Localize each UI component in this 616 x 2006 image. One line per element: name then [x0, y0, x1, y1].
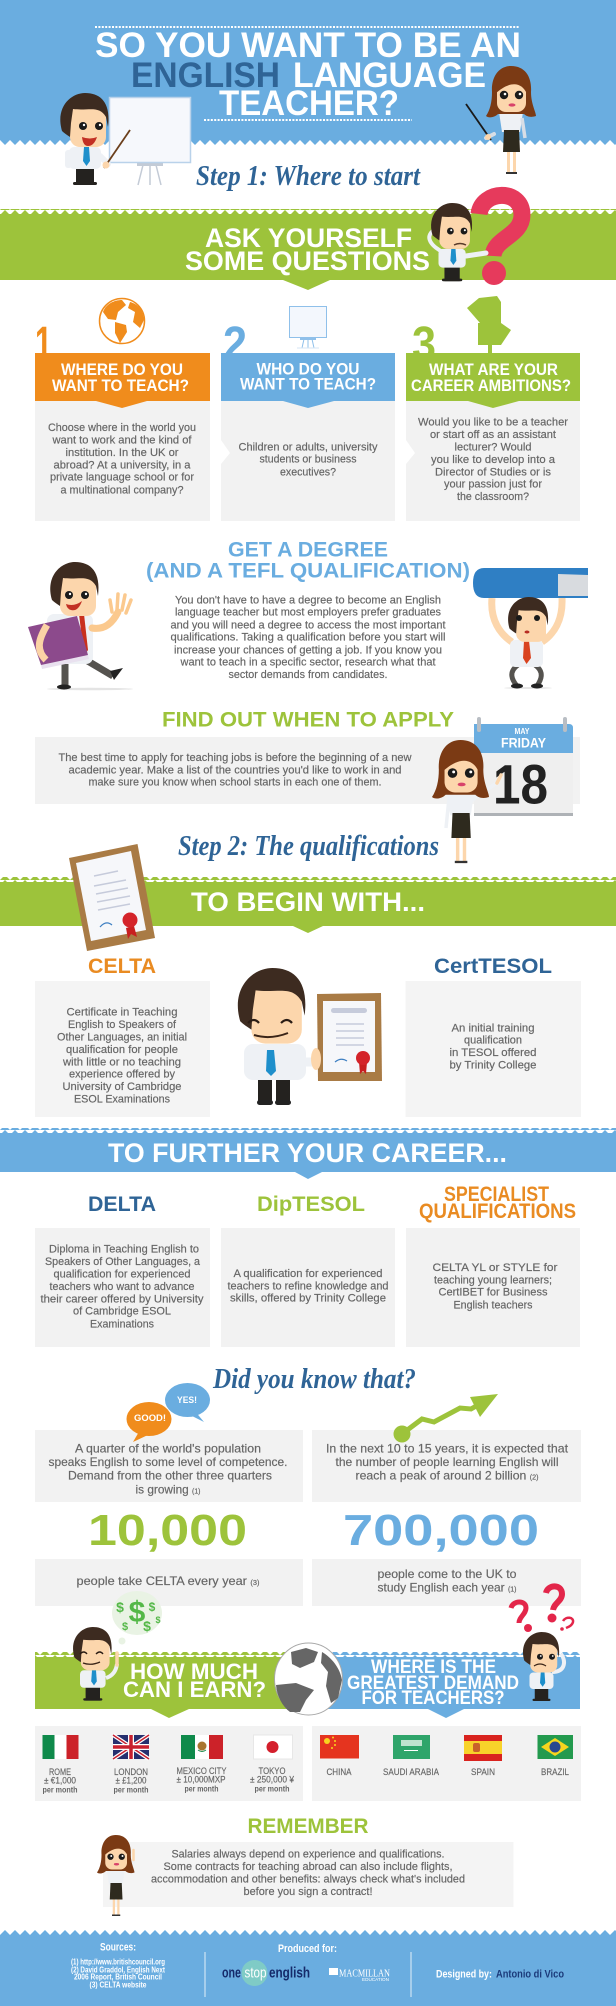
panel: who do you want to teach: Children or adults, university — [238, 441, 378, 453]
icon: calendar: MAY — [514, 727, 530, 736]
icon: calendar — [474, 717, 573, 816]
band: to further your career — [0, 1128, 616, 1179]
band: ask yourself: ASK YOURSELF — [205, 223, 412, 253]
panel: DELTA: qualification for experienced — [54, 1269, 190, 1281]
panel: DELTA: DELTA — [88, 1193, 156, 1216]
stat: 10,000 — [35, 1506, 303, 1606]
panel: salaries by city: per month — [254, 1783, 290, 1793]
section: get a degree: language teacher but most employers prefer graduates — [175, 607, 441, 619]
panel: CELTA: qualification for people — [66, 1044, 178, 1056]
title: SO YOU WANT TO BE AN — [95, 26, 521, 65]
band: to begin with: TO BEGIN WITH... — [191, 887, 425, 917]
panel: DELTA: Diploma in Teaching English to — [49, 1244, 199, 1256]
footer: sources — [71, 1942, 165, 1989]
panel: 2 billion learners: reach a peak of around 2 billion (2) — [356, 1469, 538, 1483]
panel: CELTA: CELTA — [88, 955, 156, 978]
section: get a degree: want to teach in a specific sector, research what that — [179, 657, 436, 669]
panel: specialist qualifications: SPECIALIST — [444, 1183, 549, 1206]
panel: career ambitions: CAREER AMBITIONS? — [411, 376, 571, 395]
panel: where do you want to teach: WANT TO TEACH? — [52, 376, 189, 395]
section: remember: Some contracts for teaching abroad can also include flights, — [164, 1861, 452, 1873]
panel: specialist qualifications — [406, 1183, 580, 1347]
panel: career ambitions: your passion just for — [444, 479, 542, 491]
icon: dollar thought bubble: $ — [149, 1600, 156, 1614]
panel: salaries by city: MEXICO CITY — [176, 1766, 226, 1776]
footer: sources: (2) David Graddol, English Next — [71, 1965, 165, 1974]
icon: grey globe — [274, 1643, 342, 1715]
panel: specialist qualifications: CELTA YL or STYLE for — [432, 1262, 558, 1274]
section: get a degree: sector demands from candidates. — [228, 669, 388, 681]
big number 3: 3 — [412, 318, 436, 371]
panel: quarter of the world: Demand from the other three quarters — [68, 1469, 272, 1483]
panel: quarter of the world: A quarter of the world's population — [75, 1441, 261, 1455]
big number 1: 1 — [35, 318, 52, 371]
character: waving man with purple book — [28, 562, 133, 690]
banner: greatest demand: FOR TEACHERS? — [362, 1688, 504, 1709]
panel: where do you want to teach: institution. In the UK or — [66, 447, 179, 459]
panel: salaries by city — [35, 1726, 303, 1801]
icon: calendar: FRIDAY — [501, 734, 547, 750]
section: find out when to apply — [35, 709, 580, 804]
icon: speech bubble good: GOOD! — [134, 1413, 166, 1423]
panel: countries in demand: SAUDI ARABIA — [383, 1767, 439, 1777]
footer: sources: Sources: — [100, 1942, 136, 1954]
panel: DipTESOL: A qualification for experienced — [234, 1268, 382, 1280]
band: to begin with — [0, 877, 616, 933]
character: smiling man pointing up — [73, 1627, 117, 1701]
panel: DipTESOL — [221, 1193, 395, 1347]
flag: Spain — [464, 1735, 502, 1761]
panel: CertTESOL: An initial training — [452, 1022, 534, 1034]
panel: who do you want to teach: WHO DO YOU — [256, 359, 360, 378]
band: ask yourself: SOME QUESTIONS — [185, 246, 430, 276]
icon: big question mark — [479, 195, 522, 285]
panel: career ambitions: the classroom? — [457, 491, 529, 503]
panel: salaries by city: per month — [42, 1784, 78, 1794]
panel: where do you want to teach: a multinational company? — [60, 484, 184, 496]
footer: produced for logos: Produced for: — [278, 1943, 337, 1955]
icon: small whiteboard — [290, 306, 326, 348]
stat: 700,000: study English each year (1) — [378, 1581, 516, 1595]
panel: CertTESOL: qualification — [464, 1035, 522, 1047]
title: LANGUAGE — [293, 56, 486, 95]
panel: DELTA: of Cambridge ESOL — [73, 1306, 171, 1318]
footer: produced for logos — [222, 1943, 390, 1986]
panel: where do you want to teach — [35, 353, 210, 521]
icon: rising arrow — [394, 1394, 498, 1442]
panel: career ambitions: Director of Studies or is — [435, 466, 551, 478]
flag: Saudi Arabia — [393, 1735, 430, 1759]
did you know heading: Did you know that? — [212, 1364, 416, 1395]
panel: career ambitions: lecturer? Would — [454, 441, 532, 453]
panel: quarter of the world: is growing (1) — [136, 1482, 200, 1496]
panel: CELTA: English to Speakers of — [68, 1019, 177, 1031]
character: puzzled man — [523, 1632, 564, 1701]
icon: green signpost — [467, 296, 511, 354]
icon: dollar thought bubble — [112, 1591, 162, 1644]
icon: dollar thought bubble: $ — [155, 1615, 161, 1625]
flag: Brazil — [538, 1735, 573, 1759]
big number 2: 2 — [223, 318, 247, 371]
band: ask yourself — [0, 209, 616, 290]
band: to further your career: TO FURTHER YOUR CAREER... — [108, 1138, 507, 1168]
footer band — [0, 1930, 616, 2006]
panel: salaries by city: per month — [114, 1784, 148, 1794]
section: remember — [103, 1815, 514, 1907]
panel: CELTA: ESOL Examinations — [74, 1093, 170, 1105]
panel: where do you want to teach: Choose where in the world you — [48, 422, 196, 434]
banner: greatest demand: WHERE IS THE — [371, 1657, 496, 1678]
panel: 2 billion learners: In the next 10 to 15 years, it is expected that — [326, 1441, 569, 1455]
character: man lifting blue book — [473, 568, 588, 689]
section: get a degree: qualifications. Taking a qualification before you start will — [170, 632, 446, 644]
title: ENGLISH — [131, 56, 280, 95]
panel: DELTA: teachers who want to advance — [50, 1281, 194, 1293]
step 2 heading: Step 2: The qualifications — [178, 831, 439, 862]
section: get a degree — [146, 539, 470, 681]
title: TEACHER? — [219, 84, 399, 123]
flag: Mexico — [181, 1735, 223, 1759]
panel: salaries by city: ± €1,000 — [44, 1776, 76, 1786]
banner: greatest demand: GREATEST DEMAND — [347, 1673, 519, 1694]
panel: CertTESOL — [406, 955, 581, 1117]
panel: 2 billion learners — [312, 1430, 581, 1502]
panel: specialist qualifications: QUALIFICATIONS — [419, 1200, 576, 1223]
header band — [0, 0, 616, 145]
character: confused man — [429, 203, 486, 281]
icon: calendar: 18 — [493, 752, 548, 815]
panel: countries in demand — [312, 1726, 581, 1801]
footer: produced for logos: MACMILLAN — [339, 1968, 390, 1980]
icon: dollar thought bubble: $ — [116, 1599, 124, 1615]
panel: CertTESOL: by Trinity College — [450, 1060, 536, 1072]
stat: 10,000: people take CELTA every year (3) — [76, 1574, 260, 1588]
panel: DipTESOL: skills, offered by Trinity College — [230, 1293, 386, 1305]
character: woman pointing at calendar — [432, 740, 501, 863]
icon: tilted certificate — [69, 844, 155, 951]
panel: CELTA: University of Cambridge — [62, 1081, 182, 1093]
panel: salaries by city: TOKYO — [258, 1766, 286, 1776]
banner: how much can I earn: CAN I EARN? — [123, 1677, 266, 1702]
flag: United Kingdom — [113, 1735, 149, 1759]
stat: 700,000 — [312, 1506, 581, 1606]
panel: who do you want to teach: WANT TO TEACH? — [240, 374, 376, 393]
panel: countries in demand: CHINA — [326, 1767, 352, 1777]
panel: career ambitions — [406, 353, 580, 521]
icon: speech bubble yes — [165, 1383, 210, 1422]
panel: who do you want to teach: executives? — [280, 466, 336, 478]
icon: orange globe — [100, 298, 144, 344]
panel: CELTA — [35, 955, 210, 1117]
section: find out when to apply: FIND OUT WHEN TO APPLY — [162, 709, 454, 732]
banner: how much can I earn: HOW MUCH — [130, 1659, 258, 1684]
stat: 700,000: 700,000 — [343, 1506, 539, 1555]
panel: countries in demand: SPAIN — [471, 1767, 495, 1777]
section: remember: accommodation and other benefits: always check what's included — [151, 1874, 465, 1886]
panel: specialist qualifications: teaching young learners; — [434, 1274, 552, 1286]
footer: designer credit: Designed by: — [436, 1969, 492, 1981]
flag: China — [320, 1735, 359, 1758]
section: get a degree: and you will need a degree to access the most important — [170, 619, 446, 631]
section: remember: before you sign a contract! — [244, 1886, 372, 1898]
panel: DELTA — [35, 1193, 210, 1347]
panel: DELTA: their career offered by University — [40, 1293, 204, 1305]
panel: CELTA: Certificate in Teaching — [66, 1007, 178, 1019]
panel: DipTESOL: teachers to refine knowledge and — [228, 1280, 388, 1292]
stat: 10,000: 10,000 — [88, 1506, 247, 1555]
section: find out when to apply: make sure you know when school starts in each one of them. — [88, 777, 382, 789]
icon: speech bubble yes: YES! — [177, 1395, 197, 1405]
panel: where do you want to teach: private language school or for — [50, 472, 194, 484]
footer: produced for logos: one — [222, 1964, 241, 1982]
banner: greatest demand — [320, 1652, 580, 1718]
section: find out when to apply: The best time to apply for teaching jobs is before the beginning of a new — [58, 752, 412, 764]
flag: Italy — [42, 1735, 78, 1759]
panel: salaries by city: ROME — [49, 1767, 71, 1777]
footer: sources: (3) CELTA website — [90, 1980, 147, 1989]
panel: quarter of the world: speaks English to some level of competence. — [48, 1455, 288, 1469]
flag: Japan — [254, 1735, 292, 1759]
panel: DELTA: Examinations — [90, 1318, 154, 1330]
panel: career ambitions: Would you like to be a teacher — [418, 417, 568, 429]
section: get a degree: GET A DEGREE — [228, 539, 388, 562]
panel: specialist qualifications: English teachers — [454, 1299, 533, 1311]
footer: sources: 2006 Report, British Council — [74, 1973, 162, 1982]
panel: who do you want to teach: students or business — [260, 454, 357, 466]
panel: career ambitions: or start off as an assistant — [430, 429, 556, 441]
panel: 2 billion learners: the number of people learning English will — [336, 1455, 558, 1469]
panel: DELTA: Speakers of Other Languages, a — [45, 1256, 201, 1268]
panel: salaries by city: ± £1,200 — [116, 1776, 146, 1786]
character: male teacher with pointer — [60, 93, 130, 185]
section: remember: REMEMBER — [248, 1815, 368, 1838]
panel: CELTA: with little or no teaching — [62, 1056, 181, 1068]
icon: dollar thought bubble: $ — [129, 1596, 146, 1629]
panel: specialist qualifications: CertIBET for Business — [438, 1287, 548, 1299]
panel: where do you want to teach: want to work and the kind of — [51, 434, 192, 446]
icon: dollar thought bubble: $ — [143, 1618, 151, 1634]
panel: CELTA: Other Languages, an initial — [57, 1031, 187, 1043]
title — [95, 26, 521, 123]
character: woman pointing up — [97, 1835, 134, 1916]
panel: CertTESOL: CertTESOL — [434, 955, 552, 978]
character: female teacher with pointer — [466, 66, 536, 174]
footer: sources: (1) http://www.britishcouncil.org — [71, 1957, 165, 1966]
footer: produced for logos: EDUCATION — [362, 1977, 389, 1982]
panel: countries in demand: BRAZIL — [541, 1767, 569, 1777]
panel: DipTESOL: DipTESOL — [257, 1193, 365, 1216]
section: get a degree: (AND A TEFL QUALIFICATION) — [146, 559, 470, 582]
stat: 700,000: people come to the UK to — [378, 1567, 517, 1581]
section: remember: Salaries always depend on experience and qualifications. — [172, 1849, 444, 1861]
panel: salaries by city: ± 10,000MXP — [176, 1775, 226, 1785]
icon: red question marks — [511, 1586, 573, 1632]
panel: quarter of the world — [35, 1430, 303, 1502]
section: get a degree: You don't have to have a degree to become an English — [175, 594, 441, 606]
panel: where do you want to teach: abroad? At a university, in a — [54, 459, 191, 471]
footer: designer credit: Antonio di Vico — [496, 1969, 564, 1981]
panel: salaries by city: ± 250,000 ¥ — [250, 1775, 295, 1785]
panel: salaries by city: per month — [184, 1783, 218, 1793]
footer: produced for logos: english — [269, 1964, 310, 1982]
panel: CertTESOL: in TESOL offered — [450, 1047, 536, 1059]
footer: designer credit — [436, 1969, 564, 1981]
icon: dollar thought bubble: $ — [122, 1621, 128, 1633]
character: smiling man holding certificate — [238, 968, 382, 1105]
section: find out when to apply: academic year. Make a list of the countries you'd like to work in and — [68, 764, 402, 776]
icon: speech bubble good — [126, 1402, 172, 1442]
section: get a degree: increase your chances of getting a job. If you know you — [174, 644, 442, 656]
panel: career ambitions: you like to develop into a — [431, 454, 556, 466]
panel: salaries by city: LONDON — [114, 1767, 148, 1777]
illustration: whiteboard — [110, 98, 190, 185]
panel: career ambitions: WHAT ARE YOUR — [429, 360, 558, 379]
step 1 heading: Step 1: Where to start — [196, 161, 421, 192]
footer: produced for logos: stop — [244, 1964, 266, 1982]
panel: CELTA: experience offered by — [69, 1069, 175, 1081]
panel: where do you want to teach: WHERE DO YOU — [61, 360, 183, 379]
panel: who do you want to teach — [221, 353, 395, 521]
banner: how much can I earn — [35, 1652, 325, 1718]
